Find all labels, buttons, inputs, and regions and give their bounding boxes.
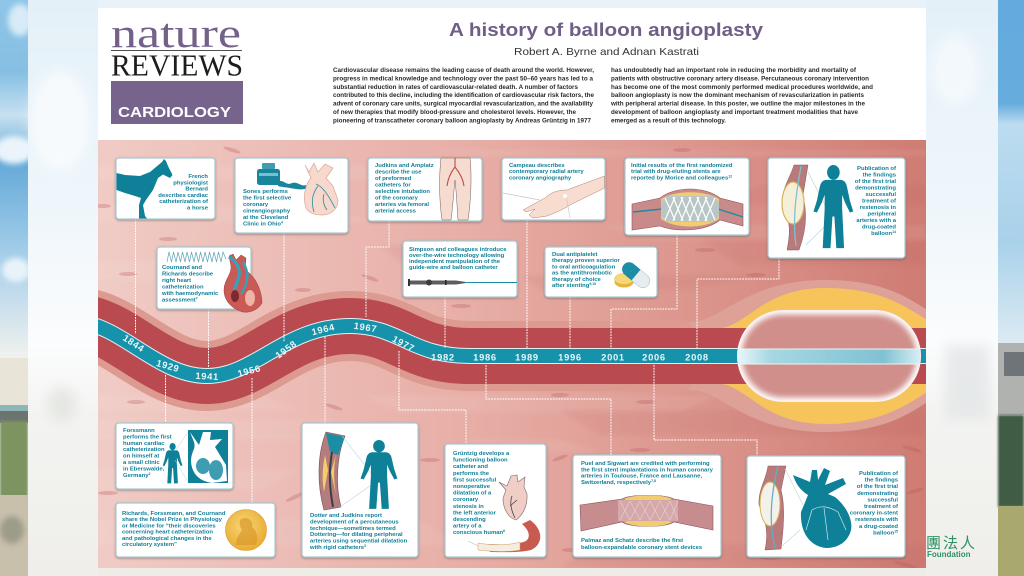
card: Grüntzig 1977: conscious human	[453, 529, 505, 536]
card: Sones 1958: cineangiography	[243, 208, 291, 214]
card: Forssmann 1929: 2	[149, 472, 151, 476]
icon: capsule	[619, 259, 653, 291]
card: Grüntzig 1977: first successful	[453, 477, 497, 483]
card: drug-coated balloon peripheral arteries 2008: successful	[866, 192, 896, 198]
card: Puel, Sigwart, Palmaz and Schatz 1986: Puel and Sigwart are credited with performing	[581, 461, 710, 467]
intro text column 2: balloon angioplasty is now the dominant mechanism of revascularization in patients	[611, 92, 864, 99]
timeline years: 1956	[236, 362, 262, 379]
card: Judkins and Amplatz 1967: selective intubation	[375, 189, 430, 195]
card: Bernard 1844: Bernard	[185, 187, 208, 193]
card: dual antiplatelet therapy 1996: as the antithrombotic	[552, 271, 613, 277]
card: drug-coated balloon in-stent restenosis 2006: restenosis with	[855, 517, 898, 523]
card: Grüntzig 1977: 6	[503, 529, 505, 533]
card: drug-coated balloon in-stent restenosis 2006: of the first trial	[857, 484, 898, 490]
card: dual antiplatelet therapy 1996: to oral anticoagulation	[552, 264, 616, 270]
card: Dotter and Judkins 1964: technique—sometimes termed	[310, 526, 396, 532]
card: Puel, Sigwart, Palmaz and Schatz 1986: Switzerland, respectively	[581, 479, 656, 486]
card: Judkins and Amplatz 1967: Judkins and Amplatz	[375, 163, 434, 169]
card: Forssmann 1929: Forssmann	[123, 428, 155, 434]
icon: heart inset	[175, 430, 228, 483]
card: drug-coated balloon in-stent restenosis 2006: treatment of	[864, 504, 898, 510]
card: Cournand and Richards 1941: Cournand and	[162, 265, 202, 271]
card: Bernard 1844: a horse	[187, 206, 209, 212]
guide band	[85, 323, 930, 376]
icon: human figure	[361, 440, 397, 509]
card: dual antiplatelet therapy 1996: after stenting	[552, 282, 596, 289]
card: Judkins and Amplatz 1967: describe the use	[375, 170, 422, 176]
card: drug-coated balloon peripheral arteries 2008: restenosis in	[860, 205, 896, 211]
card: dual antiplatelet therapy 1996: therapy proven superior	[552, 258, 620, 264]
card: Morice 2001	[625, 158, 749, 235]
intro text column 1: contributed to this decline, including the identification of cardiovascular risk factors, the	[333, 92, 594, 99]
logo: Nature Reviews Cardiology	[111, 10, 243, 124]
icon: vessel dilatation	[319, 432, 375, 510]
card: Campeau 1989: contemporary radial artery	[509, 169, 584, 175]
timeline years: 1929	[155, 357, 181, 374]
icon: teal heart	[793, 468, 851, 548]
foundation logo text: 團法人	[926, 535, 977, 552]
card: Judkins and Amplatz 1967: arterial access	[375, 208, 417, 214]
card: drug-coated balloon peripheral arteries 2008: the findings	[863, 172, 897, 178]
card: Dotter and Judkins 1964: Dottering—for dilating peripheral	[310, 532, 403, 538]
card: drug-coated balloon in-stent restenosis 2006: successful	[868, 497, 898, 503]
card: Dotter and Judkins 1964	[302, 423, 418, 557]
title: A history of balloon angioplasty	[449, 20, 763, 40]
timeline years: 2001	[601, 352, 625, 362]
card: Dotter and Judkins 1964: 3	[364, 544, 366, 548]
card: Morice 2001: trial with drug-eluting stents are	[631, 169, 721, 175]
artery with timeline	[85, 280, 930, 432]
card: Forssmann 1929	[116, 423, 233, 489]
card: Grüntzig 1977: the left anterior	[453, 510, 497, 516]
icon: vessel with drug-eluting stent	[632, 189, 743, 230]
card: Judkins and Amplatz 1967: of preformed	[375, 176, 412, 182]
card: Cournand and Richards 1941: Richards describe	[162, 272, 214, 278]
card: Puel, Sigwart, Palmaz and Schatz 1986: 7,8	[651, 479, 656, 483]
card: Forssmann 1929: on himself at	[123, 454, 159, 460]
icon: vessel with coronary stent	[580, 495, 713, 531]
foundation logo text: Foundation	[927, 550, 971, 559]
card: Campeau 1989: coronary angiography	[509, 175, 572, 181]
card: Simpson 1982: Simpson and colleagues introduce	[409, 247, 507, 253]
timeline years	[121, 320, 709, 382]
card: Nobel Prize 1956: or Medicine for “their discoveries	[122, 523, 216, 529]
card: drug-coated balloon in-stent restenosis 2006: demonstrating	[857, 491, 898, 497]
timeline years: 1996	[558, 352, 582, 362]
card: Bernard 1844: describes cardiac	[158, 193, 209, 199]
card: Sones 1958: Clinic in Ohio	[243, 220, 283, 228]
icon: arm with catheter	[503, 176, 604, 218]
timeline years: 1982	[431, 352, 455, 362]
card: Sones 1958: at the Cleveland	[243, 215, 289, 221]
timeline years: 1941	[195, 370, 219, 382]
card: Grüntzig 1977: coronary	[453, 497, 479, 503]
logo: Nature Reviews Cardiology: REVIEWS	[111, 48, 243, 82]
timeline years: 1977	[391, 333, 417, 354]
card: Nobel Prize 1956: share the Nobel Prize in Physiology	[122, 517, 223, 523]
icon: legs with arteries	[440, 158, 471, 220]
card: Grüntzig 1977: artery of a	[453, 524, 482, 530]
card: dual antiplatelet therapy 1996: Dual antiplatelet	[552, 252, 598, 258]
timeline years: 1844	[121, 332, 147, 354]
card: Bernard 1844	[116, 158, 215, 219]
card: Forssmann 1929: performs the first	[123, 434, 172, 440]
icon: pressure wave	[167, 252, 226, 262]
card: Puel, Sigwart, Palmaz and Schatz 1986: the first stent implantations in human coronary	[581, 467, 714, 473]
icon: heart cross-section	[224, 254, 262, 312]
card: Dotter and Judkins 1964: with rigid catheters	[309, 544, 366, 551]
card: Simpson 1982	[403, 241, 517, 297]
card: drug-coated balloon peripheral arteries 2008: demonstrating	[855, 186, 896, 192]
intro text column 1: pioneering of transcatheter coronary balloon angioplasty by Andreas Grüntzig in 1977	[333, 117, 591, 124]
card: Forssmann 1929: in Eberswalde,	[123, 466, 165, 472]
card: drug-coated balloon in-stent restenosis 2006: coronary in-stent	[850, 511, 898, 517]
timeline years: 1986	[473, 352, 497, 362]
card: Sones 1958	[235, 158, 348, 233]
artery outer wall	[85, 323, 930, 376]
card: Grüntzig 1977: stenosis in	[453, 504, 484, 510]
card: drug-coated balloon peripheral arteries 2008: peripheral	[868, 212, 896, 218]
card: drug-coated balloon in-stent restenosis 2006: the findings	[865, 478, 899, 484]
card: Puel, Sigwart, Palmaz and Schatz 1986: arteries in Toulouse, France and Lausanne,	[581, 474, 702, 480]
intro text column 2: emerged as a result of this technology.	[611, 117, 726, 124]
card: Morice 2001: Initial results of the first randomized	[631, 163, 733, 169]
card: Campeau 1989	[502, 158, 605, 220]
logo: Nature Reviews Cardiology: CARDIOLOGY	[118, 104, 231, 121]
card: Puel, Sigwart, Palmaz and Schatz 1986: Palmaz and Schatz describe the first	[581, 538, 683, 544]
card: Bernard 1844: French	[188, 174, 208, 180]
card: Dotter and Judkins 1964: Dotter and Judkins report	[310, 513, 382, 519]
timeline years: 1989	[515, 352, 539, 362]
card: Cournand and Richards 1941: assessment	[162, 296, 198, 304]
intro text column 2: development of balloon angioplasty and important treatment modalities that have	[611, 109, 858, 116]
intro text column 1: substantial reduction in rates of cardiovascular-related death. A number of factors	[333, 84, 578, 91]
card: Morice 2001: reported by Morice and colleagues	[631, 174, 732, 181]
intro text column 2: patients with obstructive coronary artery disease. Percutaneous coronary intervention	[611, 75, 869, 82]
card: Cournand and Richards 1941: with haemodynamic	[161, 291, 219, 297]
card: drug-coated balloon peripheral arteries 2008: balloon	[871, 230, 896, 237]
card: Judkins and Amplatz 1967: of the coronary	[375, 196, 419, 202]
card: Bernard 1844: catheterization of	[159, 199, 208, 205]
card: Cournand and Richards 1941	[157, 247, 262, 312]
panel: tissue background	[95, 140, 926, 570]
icon: human figure	[163, 443, 182, 483]
card: Morice 2001: 12	[728, 174, 732, 178]
card: Puel, Sigwart, Palmaz and Schatz 1986: balloon-expandable coronary stent devices	[581, 545, 703, 551]
card: Sones 1958: the first selective	[243, 196, 292, 202]
card: Cournand and Richards 1941: right heart	[162, 278, 191, 284]
card: Forssmann 1929: catheterization	[123, 447, 165, 453]
icon: peripheral vessel with balloon	[782, 165, 829, 250]
icon: balloon catheter	[408, 279, 517, 286]
card: Forssmann 1929: a small clinic	[123, 460, 160, 466]
card: Simpson 1982: independent manipulation of the	[409, 259, 501, 265]
card: drug-coated balloon in-stent restenosis 2006: balloon	[873, 529, 898, 536]
card: drug-coated balloon in-stent restenosis 2006: Publication of	[859, 471, 898, 477]
card: Grüntzig 1977: descending	[453, 517, 486, 523]
connector lines	[136, 219, 779, 503]
icon: heart with vessels	[304, 163, 338, 215]
card: Judkins and Amplatz 1967: catheters for	[375, 182, 411, 188]
icon: gold medal	[226, 510, 266, 550]
header panel	[98, 8, 926, 140]
intro text column 2: has become one of the most commonly performed medical procedures worldwide, and	[611, 84, 873, 91]
card: Grüntzig 1977: performs the	[453, 471, 490, 477]
icon: human figure	[814, 165, 853, 248]
icon: horse	[116, 159, 172, 218]
timeline years: 2006	[642, 352, 666, 362]
card: drug-coated balloon in-stent restenosis 2006	[747, 456, 905, 557]
card: drug-coated balloon peripheral arteries 2008: drug-coated	[862, 224, 896, 230]
intro text column 1: advent of coronary care units, surgical myocardial revascularization, and the availability	[333, 101, 593, 108]
card: drug-coated balloon peripheral arteries 2008: 14	[892, 230, 896, 234]
card: Simpson 1982: guide-wire and balloon catheter	[409, 265, 498, 271]
card: dual antiplatelet therapy 1996	[545, 247, 657, 297]
card: drug-coated balloon peripheral arteries 2008	[768, 158, 905, 258]
card: Grüntzig 1977: catheter and	[453, 464, 488, 470]
icon: vessel with balloon	[759, 466, 803, 550]
intro text column 1: of new therapies that modify blood-pressure and cholesterol levels. However, the	[333, 109, 576, 116]
card: Sones 1958: Sones performs	[243, 189, 289, 195]
intro text column 2: has undoubtedly had an important role in reducing the morbidity and mortality of	[611, 67, 857, 74]
logo: Nature Reviews Cardiology: nature	[111, 10, 241, 56]
card: Cournand and Richards 1941: catheterization	[162, 284, 204, 290]
card: Sones 1958: coronary	[243, 202, 269, 208]
card: drug-coated balloon in-stent restenosis 2006: a drug-coated	[859, 524, 898, 530]
card: Nobel Prize 1956: Richards, Forssmann, and Cournand	[122, 511, 226, 517]
intro text column 1: progress in medical knowledge and technology over the past 50–60 years has led to a	[333, 75, 593, 82]
card: Nobel Prize 1956: circulatory system”	[122, 542, 177, 548]
timeline years: 1967	[353, 320, 378, 334]
card: dual antiplatelet therapy 1996: therapy of choice	[552, 277, 601, 283]
card: Puel, Sigwart, Palmaz and Schatz 1986	[573, 455, 721, 557]
icon: heart with balloon catheter	[468, 475, 540, 552]
authors: Robert A. Byrne and Adnan Kastrati	[514, 47, 699, 58]
card: Dotter and Judkins 1964: development of a percutaneous	[310, 519, 399, 525]
card: drug-coated balloon peripheral arteries 2008: Publication of	[857, 166, 896, 172]
icon: ink bottle	[257, 163, 311, 189]
intro text column 1: Cardiovascular disease remains the leading cause of death around the world. However,	[333, 67, 594, 74]
card: Grüntzig 1977: nonoperative	[453, 484, 491, 490]
card: drug-coated balloon peripheral arteries 2008: of the first trial	[855, 179, 896, 185]
card: Grüntzig 1977	[445, 444, 546, 557]
card: drug-coated balloon peripheral arteries 2008: arteries with a	[856, 218, 897, 224]
card: Bernard 1844: physiologist	[173, 180, 208, 186]
card: Judkins and Amplatz 1967	[368, 158, 482, 221]
card: drug-coated balloon peripheral arteries 2008: treatment of	[862, 198, 896, 204]
card: Cournand and Richards 1941: 7	[196, 296, 198, 300]
intro text column 2: with peripheral arterial disease. In this poster, we outline the major milestones in the	[610, 101, 865, 108]
card: Grüntzig 1977: Grüntzig develops a	[453, 451, 510, 457]
card: dual antiplatelet therapy 1996: 9,10	[589, 282, 596, 286]
icon: tablet	[614, 274, 634, 288]
timeline years: 1958	[273, 338, 299, 361]
card: Nobel Prize 1956	[116, 503, 275, 557]
card: Simpson 1982: over-the-wire technology allowing	[409, 253, 505, 259]
card: Forssmann 1929: Germany	[123, 472, 151, 479]
balloon	[737, 310, 921, 402]
card: Nobel Prize 1956: concerning heart catheterization	[122, 530, 213, 536]
card: Sones 1958: 4	[281, 220, 283, 224]
artery lumen	[85, 323, 930, 376]
card: Nobel Prize 1956: and pathological changes in the	[122, 536, 212, 542]
card: Dotter and Judkins 1964: arteries using sequential dilatation	[310, 539, 408, 545]
plaque and vessel bulge	[690, 280, 930, 432]
card: Forssmann 1929: human cardiac	[123, 441, 165, 447]
card: Grüntzig 1977: functioning balloon	[453, 458, 508, 464]
timeline years: 2008	[685, 352, 709, 362]
timeline years: 1964	[310, 321, 336, 337]
card: Grüntzig 1977: dilatation of a	[453, 491, 492, 497]
card: Judkins and Amplatz 1967: arteries via femoral	[375, 202, 429, 208]
card: Campeau 1989: Campeau describes	[509, 163, 565, 169]
card: drug-coated balloon in-stent restenosis 2006: 15	[894, 529, 898, 533]
